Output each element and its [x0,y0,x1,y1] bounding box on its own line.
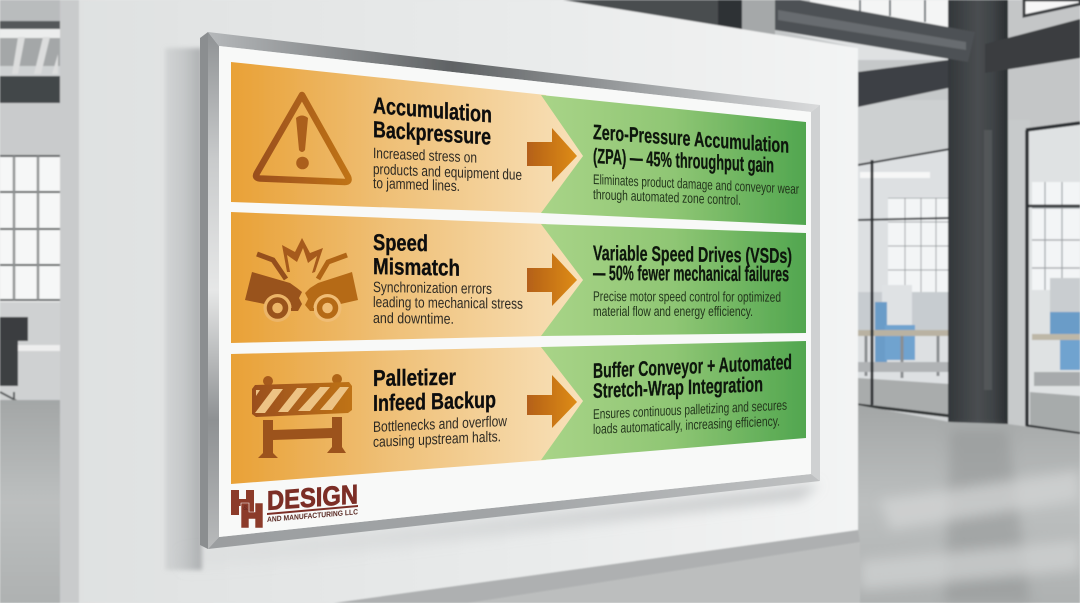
frame: bottom rail [208,474,820,549]
solution description: Ensures continuous palletizing and secures [593,397,787,422]
problem panel background [231,212,583,343]
background: steel beams [775,0,1080,107]
icon: car crash [245,238,358,322]
solution panel background [541,341,806,460]
problem description: Synchronization errors [373,279,492,298]
background: steel column [948,0,1008,424]
heading: speed mismatch: Mismatch [373,253,460,281]
frame: top rail [208,32,820,112]
solution description: through automated zone control. [593,186,741,208]
row 1: accumulation backpressure [231,62,806,225]
logo: H&H Design and Manufacturing LLC [231,479,359,528]
icon: road barrier [252,374,352,458]
problem description [373,279,523,328]
problem description [373,413,507,451]
heading: variable speed drives [593,242,792,286]
problem description: causing upstream halts. [373,428,501,451]
heading: palletizer infeed backup [373,364,496,416]
problem description: Increased stress on [373,145,477,167]
background: display wall [79,0,858,603]
logo mark: H&H: & [243,505,248,512]
frame: left rail [208,32,219,549]
heading: palletizer infeed backup: Infeed Backup [373,386,496,416]
background: right glass partition with workshop [1008,120,1080,434]
arrow [527,128,577,182]
background: wall side strip [60,0,79,603]
background: floor beneath wall base [468,540,860,603]
arrow [527,253,577,306]
heading: zero-pressure accumulation: (ZPA) — 45% throughput gain [593,145,774,177]
solution panel background [541,95,806,225]
heading: variable speed drives: — 50% fewer mechanical failures [593,262,789,286]
heading: zero-pressure accumulation: Zero-Pressure Accumulation [593,121,789,158]
row 2: speed mismatch [231,212,806,343]
problem description: to jammed lines. [373,175,460,195]
heading: palletizer infeed backup: Palletizer [373,364,456,391]
solution description: Precise motor speed control for optimized [593,288,781,305]
frame: right rail [811,105,820,481]
problem description: Bottlenecks and overflow [373,413,507,436]
solution description: material flow and energy efficiency. [593,303,753,319]
heading: buffer conveyor: Stretch-Wrap Integration [593,373,763,403]
logo wordmark: DESIGN [267,479,358,516]
heading: speed mismatch [373,229,460,281]
solution description [593,288,781,319]
heading: speed mismatch: Speed [373,229,428,256]
problem description [373,145,522,195]
background: concrete floor [858,405,1080,603]
solution description: loads automatically, increasing efficiency. [593,413,780,437]
solution description [593,397,787,437]
logo rule [267,505,358,515]
heading: accumulation backpressure: Accumulation [373,92,492,128]
background: wall base board [334,530,860,603]
icon: warning triangle [256,95,349,182]
arrow [527,375,577,428]
solution panel background [541,224,806,336]
problem panel background [231,62,583,213]
problem description: products and equipment due [373,161,522,184]
sign board [200,32,820,549]
heading: buffer conveyor: Buffer Conveyor + Automated [593,351,792,383]
solution description [593,171,799,208]
heading: buffer conveyor [593,351,792,403]
heading: accumulation backpressure [373,92,492,150]
problem panel background [231,347,583,484]
heading: accumulation backpressure: Backpressure [373,116,491,150]
logo tagline: AND MANUFACTURING LLC [267,507,359,524]
frame: outer left return [200,32,208,549]
background: left glass partition with workshop [858,149,950,416]
background: left room ceiling, window and floor [0,0,62,603]
problem description: and downtime. [373,310,454,328]
background: upper room and ceiling [560,0,1080,160]
solution description: Eliminates product damage and conveyor wear [593,171,799,197]
problem description: leading to mechanical stress [373,294,523,313]
heading: zero-pressure accumulation [593,121,789,177]
white sign face [219,46,811,537]
row 3: palletizer infeed backup [231,341,806,484]
frame shadow on wall [165,48,820,575]
heading: variable speed drives: Variable Speed Drives (VSDs) [593,242,792,268]
